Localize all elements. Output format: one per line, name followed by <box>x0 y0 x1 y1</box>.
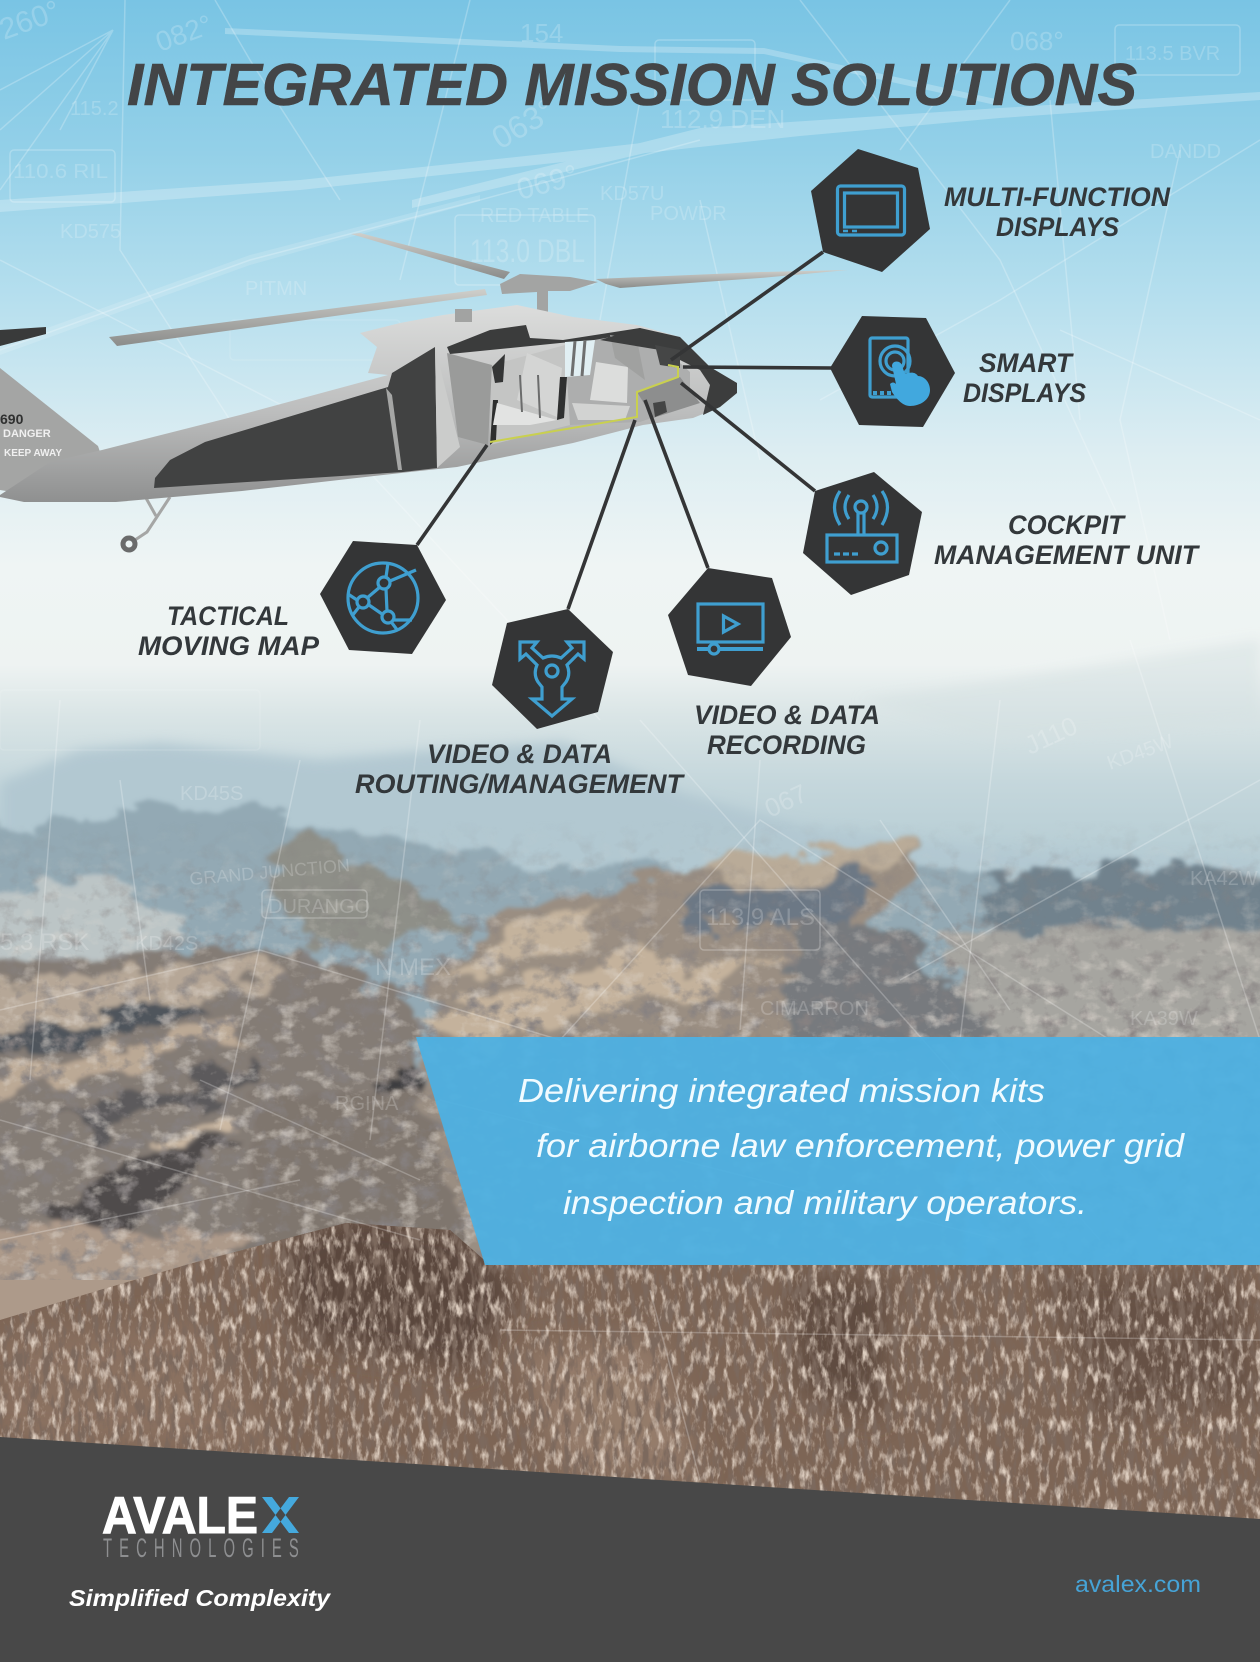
rear cabin interior <box>490 345 570 445</box>
node: video and data recording <box>668 568 880 760</box>
website: avalex.com <box>1075 1571 1201 1597</box>
background: aeronautical chart overlay: 112.9 DEN <box>660 104 785 134</box>
background: aeronautical chart overlay: N MEX <box>375 954 451 981</box>
left rotor blade <box>109 289 487 346</box>
banner text: inspection and military operators. <box>563 1184 1087 1221</box>
label: MULTI-FUNCTION <box>944 182 1170 212</box>
hexagon <box>811 149 930 272</box>
cabin roof opening <box>447 325 660 354</box>
label <box>138 601 320 661</box>
icon: display <box>838 186 904 235</box>
label: DISPLAYS <box>963 378 1086 408</box>
icon: touch phone <box>870 338 930 406</box>
label: SMART <box>979 348 1074 378</box>
tail fin <box>0 368 106 500</box>
logo: Avalex Technologies: TECHNOLOGIES <box>103 1532 299 1563</box>
icon: network globe <box>348 563 418 633</box>
node: cockpit management unit <box>803 472 1200 595</box>
hexagon <box>803 472 922 595</box>
label <box>355 739 686 799</box>
window <box>565 340 595 377</box>
callout: blue mission banner <box>416 1037 1260 1265</box>
hexagon <box>668 568 791 686</box>
helicopter <box>0 233 848 550</box>
background: aeronautical chart overlay: KD57U <box>600 183 664 205</box>
background: aeronautical chart overlay: 067 <box>760 778 812 823</box>
tail markings <box>0 411 62 459</box>
background: aeronautical chart overlay: DURANGO <box>268 896 370 918</box>
background: aeronautical chart overlay: GRAND JUNCTION <box>189 855 351 889</box>
chart airway bands <box>0 28 1260 355</box>
label <box>934 510 1200 570</box>
front seat <box>590 362 628 403</box>
logo: Avalex Technologies: AVALE <box>102 1487 258 1545</box>
background: aeronautical chart overlay: KA39W <box>1130 1008 1198 1030</box>
tail markings: DANGER <box>3 428 51 440</box>
background: aeronautical chart overlay: 113.5 BVR <box>1125 43 1220 65</box>
label <box>963 348 1086 408</box>
label: ROUTING/MANAGEMENT <box>355 769 686 799</box>
node: tactical moving map <box>138 541 446 661</box>
node: smart displays <box>830 316 1086 427</box>
node: video and data routing <box>355 609 686 799</box>
logo: Avalex Technologies <box>102 1487 299 1563</box>
background: aeronautical chart overlay: RGINA <box>335 1093 399 1115</box>
banner text: Delivering integrated mission kits <box>518 1072 1045 1109</box>
cockpit nose <box>600 328 737 415</box>
background: aeronautical chart overlay: 113.0 DBL <box>470 233 585 269</box>
background: aeronautical chart overlay: 068° <box>1010 26 1064 56</box>
forward cabin interior <box>565 332 690 425</box>
icon: router <box>827 491 897 562</box>
background: aeronautical chart overlay: 115.2 <box>70 98 119 120</box>
hexagon <box>492 609 613 729</box>
label: RECORDING <box>707 730 866 760</box>
icon: three-way arrows <box>520 642 584 716</box>
background: aeronautical chart overlay: RED TABLE <box>480 205 589 227</box>
rotor hub and mast <box>500 274 598 312</box>
label: VIDEO & DATA <box>694 700 880 730</box>
rear rotor blade <box>351 233 510 279</box>
banner text: for airborne law enforcement, power grid <box>536 1127 1186 1164</box>
background: aeronautical chart overlay: 082° <box>151 9 216 58</box>
label: MANAGEMENT UNIT <box>934 540 1200 570</box>
leader lines <box>417 252 832 609</box>
background: aeronautical chart overlay: 5.3 RSK <box>0 929 89 956</box>
background: aeronautical chart overlay: 113.9 ALS <box>706 904 815 931</box>
background: aeronautical chart overlay: 069° <box>513 159 582 207</box>
label <box>694 700 880 760</box>
tail markings: 690 <box>0 411 24 427</box>
tail markings: KEEP AWAY <box>4 448 62 459</box>
dark cutaway panels <box>154 347 437 488</box>
rear seats <box>517 353 562 417</box>
landing gear <box>123 497 170 550</box>
background: aeronautical chart overlay: 154 <box>520 18 563 48</box>
label: COCKPIT <box>1008 510 1126 540</box>
label: VIDEO & DATA <box>427 739 612 769</box>
banner text <box>518 1072 1186 1221</box>
label: MOVING MAP <box>138 631 320 661</box>
background: aeronautical chart overlay: PITMN <box>245 278 307 300</box>
node: multi-function displays <box>811 149 1170 272</box>
label: DISPLAYS <box>996 212 1119 242</box>
title: INTEGRATED MISSION SOLUTIONS <box>127 52 1137 118</box>
right rotor blade <box>596 270 848 288</box>
background: aeronautical chart overlay: KD42S <box>135 933 198 955</box>
background: aeronautical chart overlay: KA42W <box>1190 868 1258 890</box>
footer band <box>0 1437 1260 1662</box>
beacon <box>455 309 472 322</box>
background: aeronautical chart overlay: POWDR <box>650 203 727 225</box>
hexagon <box>320 541 446 654</box>
rear bulkhead <box>610 335 645 380</box>
wiring harness <box>490 365 678 442</box>
background: aeronautical chart overlay: KD45W <box>1104 730 1177 775</box>
background: aerial mountains <box>0 640 1260 1540</box>
console <box>637 377 700 418</box>
tagline: Simplified Complexity <box>69 1585 331 1611</box>
background: aeronautical chart overlay: J110 <box>1020 710 1082 760</box>
background: aeronautical chart overlay: DANDD <box>1150 141 1221 163</box>
background: aeronautical chart overlay: 110.6 RIL <box>13 161 108 183</box>
label <box>944 182 1170 242</box>
fuselage <box>0 305 737 502</box>
hexagon <box>830 316 955 427</box>
background: aeronautical chart overlay: KD575 <box>60 221 121 243</box>
tail stabilizer <box>0 327 46 346</box>
background: aeronautical chart overlay: 063° <box>486 92 561 156</box>
label: TACTICAL <box>167 601 289 631</box>
icon: video player <box>697 604 763 654</box>
cabin door <box>447 353 492 445</box>
background: aeronautical chart overlay: CIMARRON <box>760 998 869 1020</box>
background: aeronautical chart overlay: KD45S <box>180 783 243 805</box>
